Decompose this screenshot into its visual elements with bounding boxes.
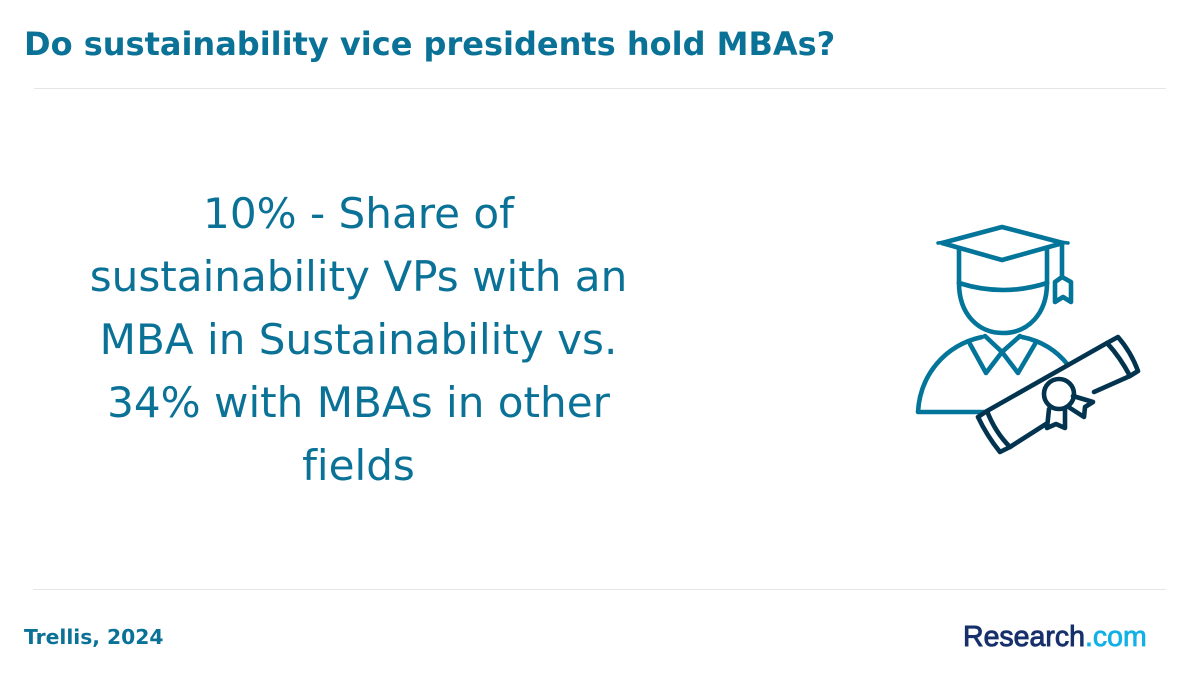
main statement: fields (302, 441, 415, 490)
title: Do sustainability vice presidents hold MBAs? (24, 24, 835, 62)
main statement: 10% - Share of (203, 189, 514, 238)
main statement: MBA in Sustainability vs. (100, 315, 617, 364)
icon: graduate with diploma (916, 224, 1140, 454)
source: Trellis, 2024 (24, 625, 164, 649)
icon: graduate (918, 227, 1071, 412)
icon: diploma (978, 337, 1138, 452)
logo: Research.com: Research.com (963, 621, 1147, 653)
main statement: 34% with MBAs in other (107, 378, 610, 427)
main statement (90, 189, 627, 490)
main statement: sustainability VPs with an (90, 252, 627, 301)
